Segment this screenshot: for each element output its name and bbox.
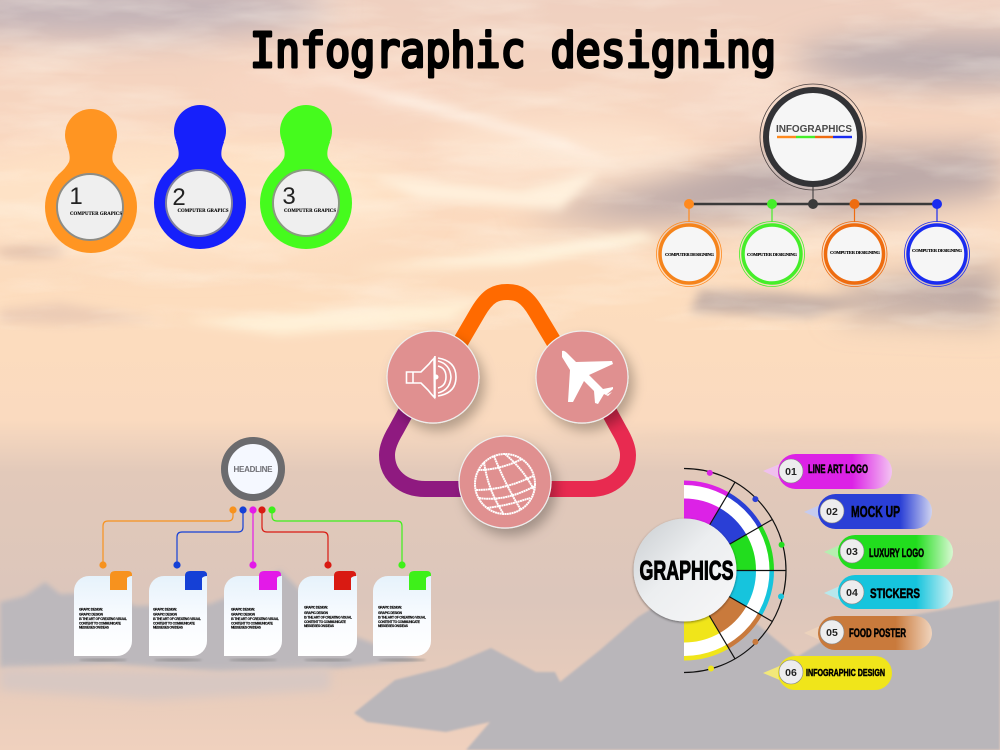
bulb 2 [154, 105, 246, 249]
pill 03: LUXURY LOGO [869, 546, 924, 560]
card 1: CONTENT TO COMMUNICATE [79, 622, 122, 626]
connector: orange [100, 507, 236, 568]
card 4: CONTENT TO COMMUNICATE [304, 620, 347, 624]
connector: magenta [250, 507, 256, 568]
segmented rings [684, 483, 772, 658]
bulb 3: 3 [282, 183, 296, 210]
pill 06 [763, 656, 892, 690]
icon: airplane [536, 331, 628, 423]
pill 04 [824, 575, 953, 609]
card 3: CONTENT TO COMMUNICATE [231, 622, 274, 626]
connector: blue [174, 507, 246, 568]
outer arc with dividers and dots [684, 468, 786, 672]
ring: orange top segment [440, 292, 575, 377]
connector: green [269, 507, 405, 568]
node 1 [656, 222, 722, 286]
card 3: IS THE ART OF CREATING VISUAL [231, 617, 279, 621]
card 1: MESSEGES ON IDEAS [79, 626, 110, 630]
panel: headline tree [74, 440, 431, 662]
pill 02: 02 [826, 506, 838, 518]
card 4: MESSEGES ON IDEAS [304, 624, 335, 628]
node 2: COMPUTER DESIGNING [747, 252, 797, 257]
bulb 2: COMPUTER GRAPICS [178, 209, 229, 214]
card 2: GRAPIC DESIGN: [153, 608, 177, 612]
card 5: IS THE ART OF CREATING VISUAL [378, 616, 426, 620]
card 5 [373, 571, 431, 662]
card 4 [298, 571, 357, 662]
card 5: GRAPIC DESIGN [378, 611, 403, 615]
pill 03: 03 [846, 546, 858, 558]
card 2: GRAPIC DESIGN [153, 612, 178, 616]
pill 05: 05 [826, 627, 838, 639]
pill 06: 06 [785, 667, 797, 679]
pill 01 [763, 454, 892, 489]
pill 02 [804, 494, 932, 529]
card 2: IS THE ART OF CREATING VISUAL [153, 617, 201, 621]
pill 04: STICKERS [870, 585, 920, 601]
card 1: GRAPIC DESIGN [79, 612, 104, 616]
card 2: MESSEGES ON IDEAS [153, 626, 184, 630]
pill 04: 04 [846, 587, 858, 599]
panel: graphics semicircle chart [634, 454, 953, 690]
bulb 3: COMPUTER GRAPICS [284, 209, 336, 214]
ring: red right segment [505, 377, 628, 489]
panel: infographics org tree [656, 84, 970, 286]
pill 06: INFOGRAPHIC DESIGN [806, 667, 885, 679]
pill 02: MOCK UP [851, 504, 900, 521]
bulb 1 [45, 109, 137, 253]
card 4: GRAPIC DESIGN: [304, 606, 328, 610]
title: Infographic designing [250, 23, 776, 79]
bulb 3 [260, 105, 352, 249]
node 4 [904, 222, 970, 286]
main node: infographics [760, 84, 866, 190]
connector lines [684, 186, 942, 222]
card 4: IS THE ART OF CREATING VISUAL [304, 616, 352, 620]
bulb 1: 1 [69, 183, 83, 210]
headline node: HEADLINE [234, 465, 273, 474]
panel: numbered bulbs [45, 105, 352, 253]
pill 01: LINE ART LOGO [808, 462, 868, 476]
center disc: graphics: GRAPHICS [640, 556, 734, 586]
card 2 [149, 571, 207, 662]
node 4: COMPUTER DESIGNING [912, 248, 962, 253]
card 2: CONTENT TO COMMUNICATE [153, 622, 196, 626]
card 5: GRAPIC DESIGN: [378, 606, 402, 610]
node 3: COMPUTER DESIGNING [830, 250, 880, 255]
connector: red [259, 507, 331, 568]
icon: speaker [387, 331, 479, 423]
card 3: GRAPIC DESIGN [231, 612, 256, 616]
node 2 [740, 222, 804, 286]
card 1: GRAPIC DESIGN: [79, 608, 103, 612]
card 3 [224, 571, 282, 662]
card 1: IS THE ART OF CREATING VISUAL [79, 617, 127, 621]
pill 01: 01 [785, 466, 797, 478]
card 5: MESSEGES ON IDEAS [378, 624, 409, 628]
pill 05: FOOD POSTER [849, 626, 906, 640]
ring: purple left segment [387, 377, 505, 489]
center disc: graphics [634, 518, 736, 622]
card 5: CONTENT TO COMMUNICATE [378, 620, 421, 624]
node 1: COMPUTER DESIGNING [665, 252, 714, 257]
pill 03 [824, 535, 953, 569]
node 3 [822, 222, 887, 286]
bulb 1: COMPUTER GRAPICS [70, 212, 122, 217]
icon: globe [459, 436, 551, 528]
pill 05 [804, 616, 932, 650]
main node: infographics: INFOGRAPHICS [776, 124, 852, 135]
headline node [224, 440, 282, 498]
card 4: GRAPIC DESIGN [304, 611, 329, 615]
card 3: MESSEGES ON IDEAS [231, 626, 262, 630]
card 3: GRAPIC DESIGN: [231, 608, 255, 612]
bulb 2: 2 [172, 184, 186, 211]
card 1 [74, 571, 132, 662]
panel: triangle cycle [387, 292, 628, 528]
